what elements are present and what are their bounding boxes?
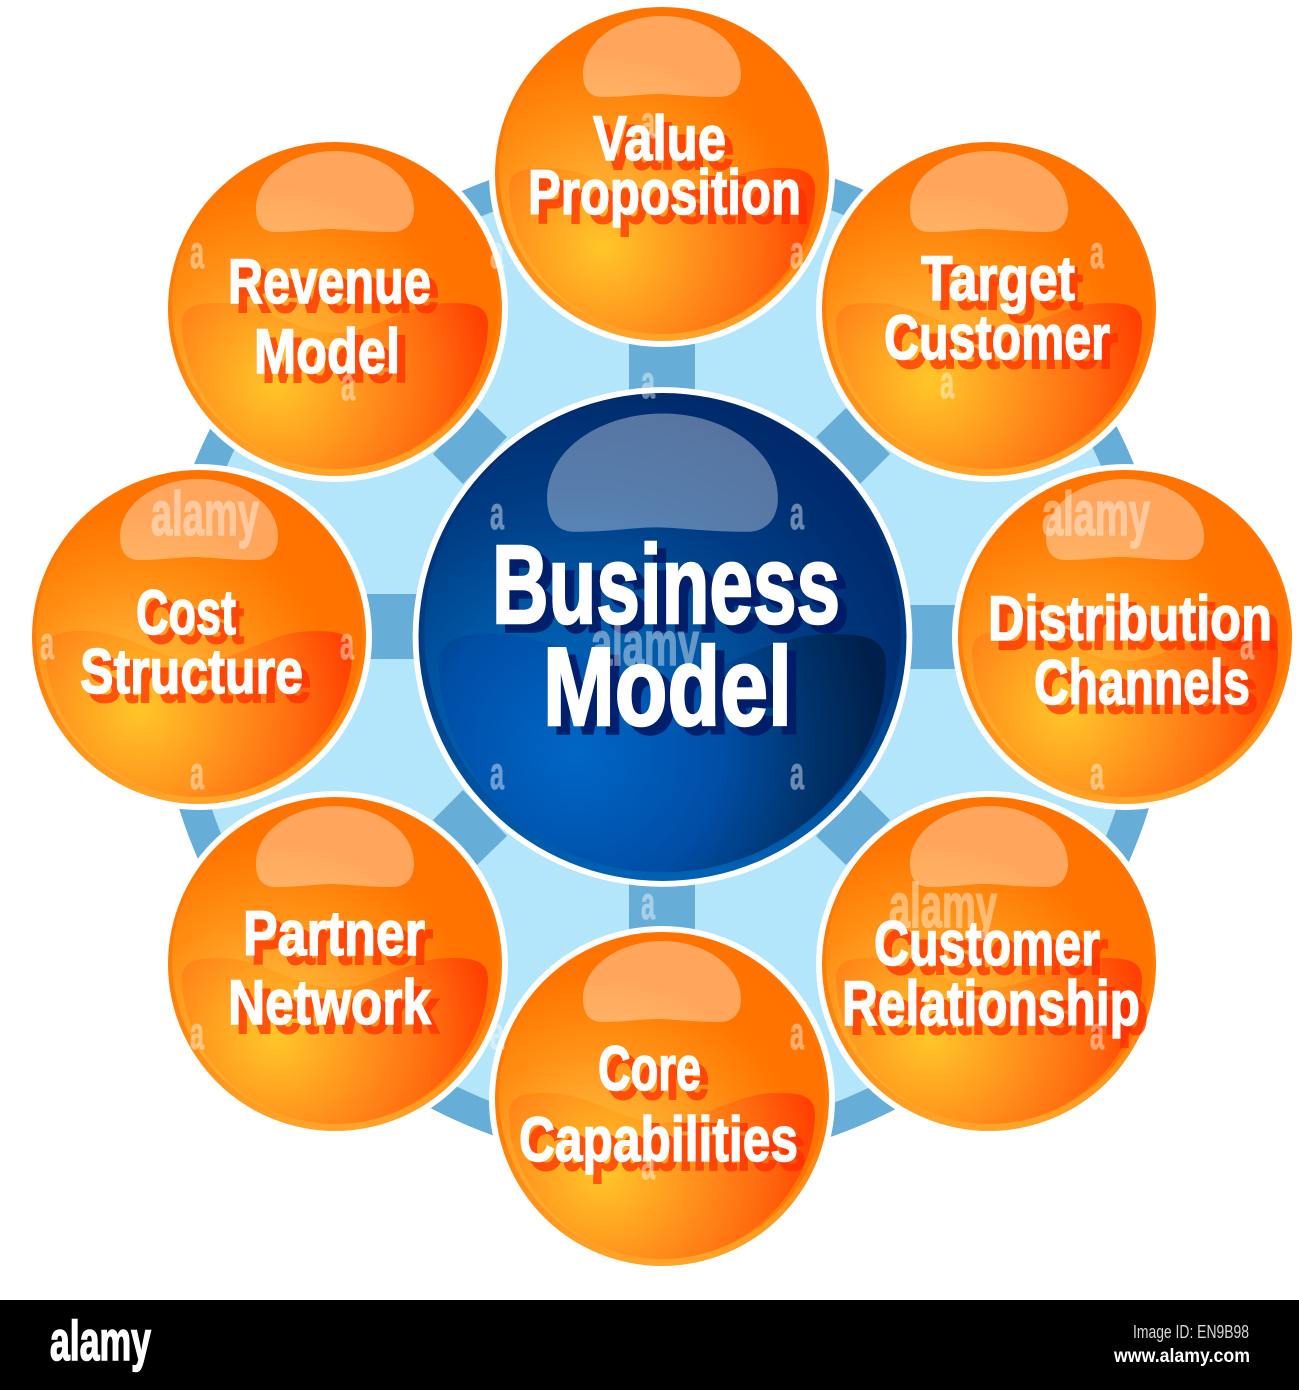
image watermark: a	[190, 226, 204, 278]
image watermark: a	[790, 1007, 804, 1059]
image watermark: a	[1090, 226, 1104, 278]
circle: Core Capabilities: Core	[598, 1034, 701, 1104]
hub title: Business	[492, 523, 840, 647]
footer image id: Image ID: EN9B98	[1133, 1322, 1249, 1342]
outer ring: darker blue band	[156, 149, 1172, 1165]
circle: Cost Structure: Cost	[136, 578, 236, 648]
circle: Cost Structure: Structure	[80, 637, 303, 707]
circle: Partner Network	[162, 791, 508, 1137]
footer logo: alamy	[50, 1309, 151, 1372]
circle: Revenue Model	[162, 136, 508, 482]
circle: Partner Network: Network	[228, 968, 432, 1038]
circle: Core Capabilities	[489, 926, 835, 1272]
image watermark: a	[1090, 747, 1104, 799]
image watermark: a	[40, 617, 54, 669]
circle: Cost Structure	[26, 464, 372, 810]
image watermark: alamy	[1042, 480, 1150, 549]
circle: Target Customer: Target	[921, 244, 1075, 314]
image watermark: a	[940, 356, 954, 408]
image watermark: a	[641, 96, 655, 148]
circle: Core Capabilities: Capabilities	[519, 1105, 798, 1175]
circle: Partner Network: Partner	[251, 908, 433, 978]
image watermark: a	[641, 877, 655, 929]
circle: Target Customer: Target	[929, 253, 1083, 323]
image watermark: a	[490, 226, 504, 278]
hub title	[492, 523, 849, 757]
circle: Value Proposition: Proposition	[528, 158, 801, 228]
image watermark: alamy	[889, 872, 997, 941]
connectors between hub and outer circles	[365, 340, 962, 935]
image watermark: a	[490, 747, 504, 799]
circle: Revenue Model: Model	[262, 326, 408, 396]
inner pale blue disc	[187, 180, 1141, 1134]
image watermark: a	[790, 226, 804, 278]
circle: Value Proposition: Value	[601, 113, 734, 183]
image watermark	[40, 96, 1254, 1189]
circle: Target Customer: Customer	[884, 303, 1110, 373]
hub title: Model	[552, 633, 801, 757]
image watermark: a	[341, 358, 355, 410]
image watermark: a	[1240, 617, 1254, 669]
circle: Target Customer	[816, 136, 1162, 482]
circle: Customer Relationship: Relationship	[850, 978, 1148, 1048]
image watermark: a	[490, 1007, 504, 1059]
circle: Revenue Model: Model	[254, 317, 400, 387]
image watermark: a	[190, 747, 204, 799]
circle: Customer Relationship: Relationship	[842, 969, 1140, 1039]
circle: Value Proposition: Value	[593, 104, 726, 174]
circle: Revenue Model: Revenue	[236, 256, 439, 326]
circle: Customer Relationship: Customer	[874, 909, 1100, 979]
image watermark: a	[790, 487, 804, 539]
image watermark: a	[641, 356, 655, 408]
footer url: www.alamy.com	[1113, 1346, 1250, 1367]
footer bar	[0, 1300, 1299, 1390]
circle: Partner Network: Partner	[243, 899, 425, 969]
hub circle: Business Model	[413, 387, 912, 887]
circle: Value Proposition	[489, 1, 835, 347]
circle: Core Capabilities: Core	[606, 1043, 709, 1113]
circle: Revenue Model: Revenue	[228, 247, 431, 317]
circle: Customer Relationship: Customer	[882, 918, 1108, 988]
image watermark: a	[790, 747, 804, 799]
circle: Partner Network: Network	[236, 977, 440, 1047]
image watermark: a	[641, 1137, 655, 1189]
circle: Cost Structure: Cost	[144, 587, 244, 657]
hub title: Model	[543, 625, 792, 749]
circle: Distribution Channels	[952, 464, 1298, 810]
image watermark: a	[190, 1007, 204, 1059]
image watermark: a	[340, 617, 354, 669]
circle: Value Proposition: Proposition	[536, 167, 809, 237]
image watermark: alamy	[151, 480, 259, 549]
circle: Cost Structure: Structure	[88, 646, 311, 716]
circle: Core Capabilities: Capabilities	[527, 1114, 806, 1184]
image watermark: alamy	[591, 610, 699, 679]
circle: Customer Relationship	[816, 791, 1162, 1137]
hub title: Business	[501, 531, 849, 655]
image watermark: a	[1090, 1007, 1104, 1059]
image watermark: a	[490, 487, 504, 539]
circle: Target Customer: Customer	[892, 312, 1118, 382]
